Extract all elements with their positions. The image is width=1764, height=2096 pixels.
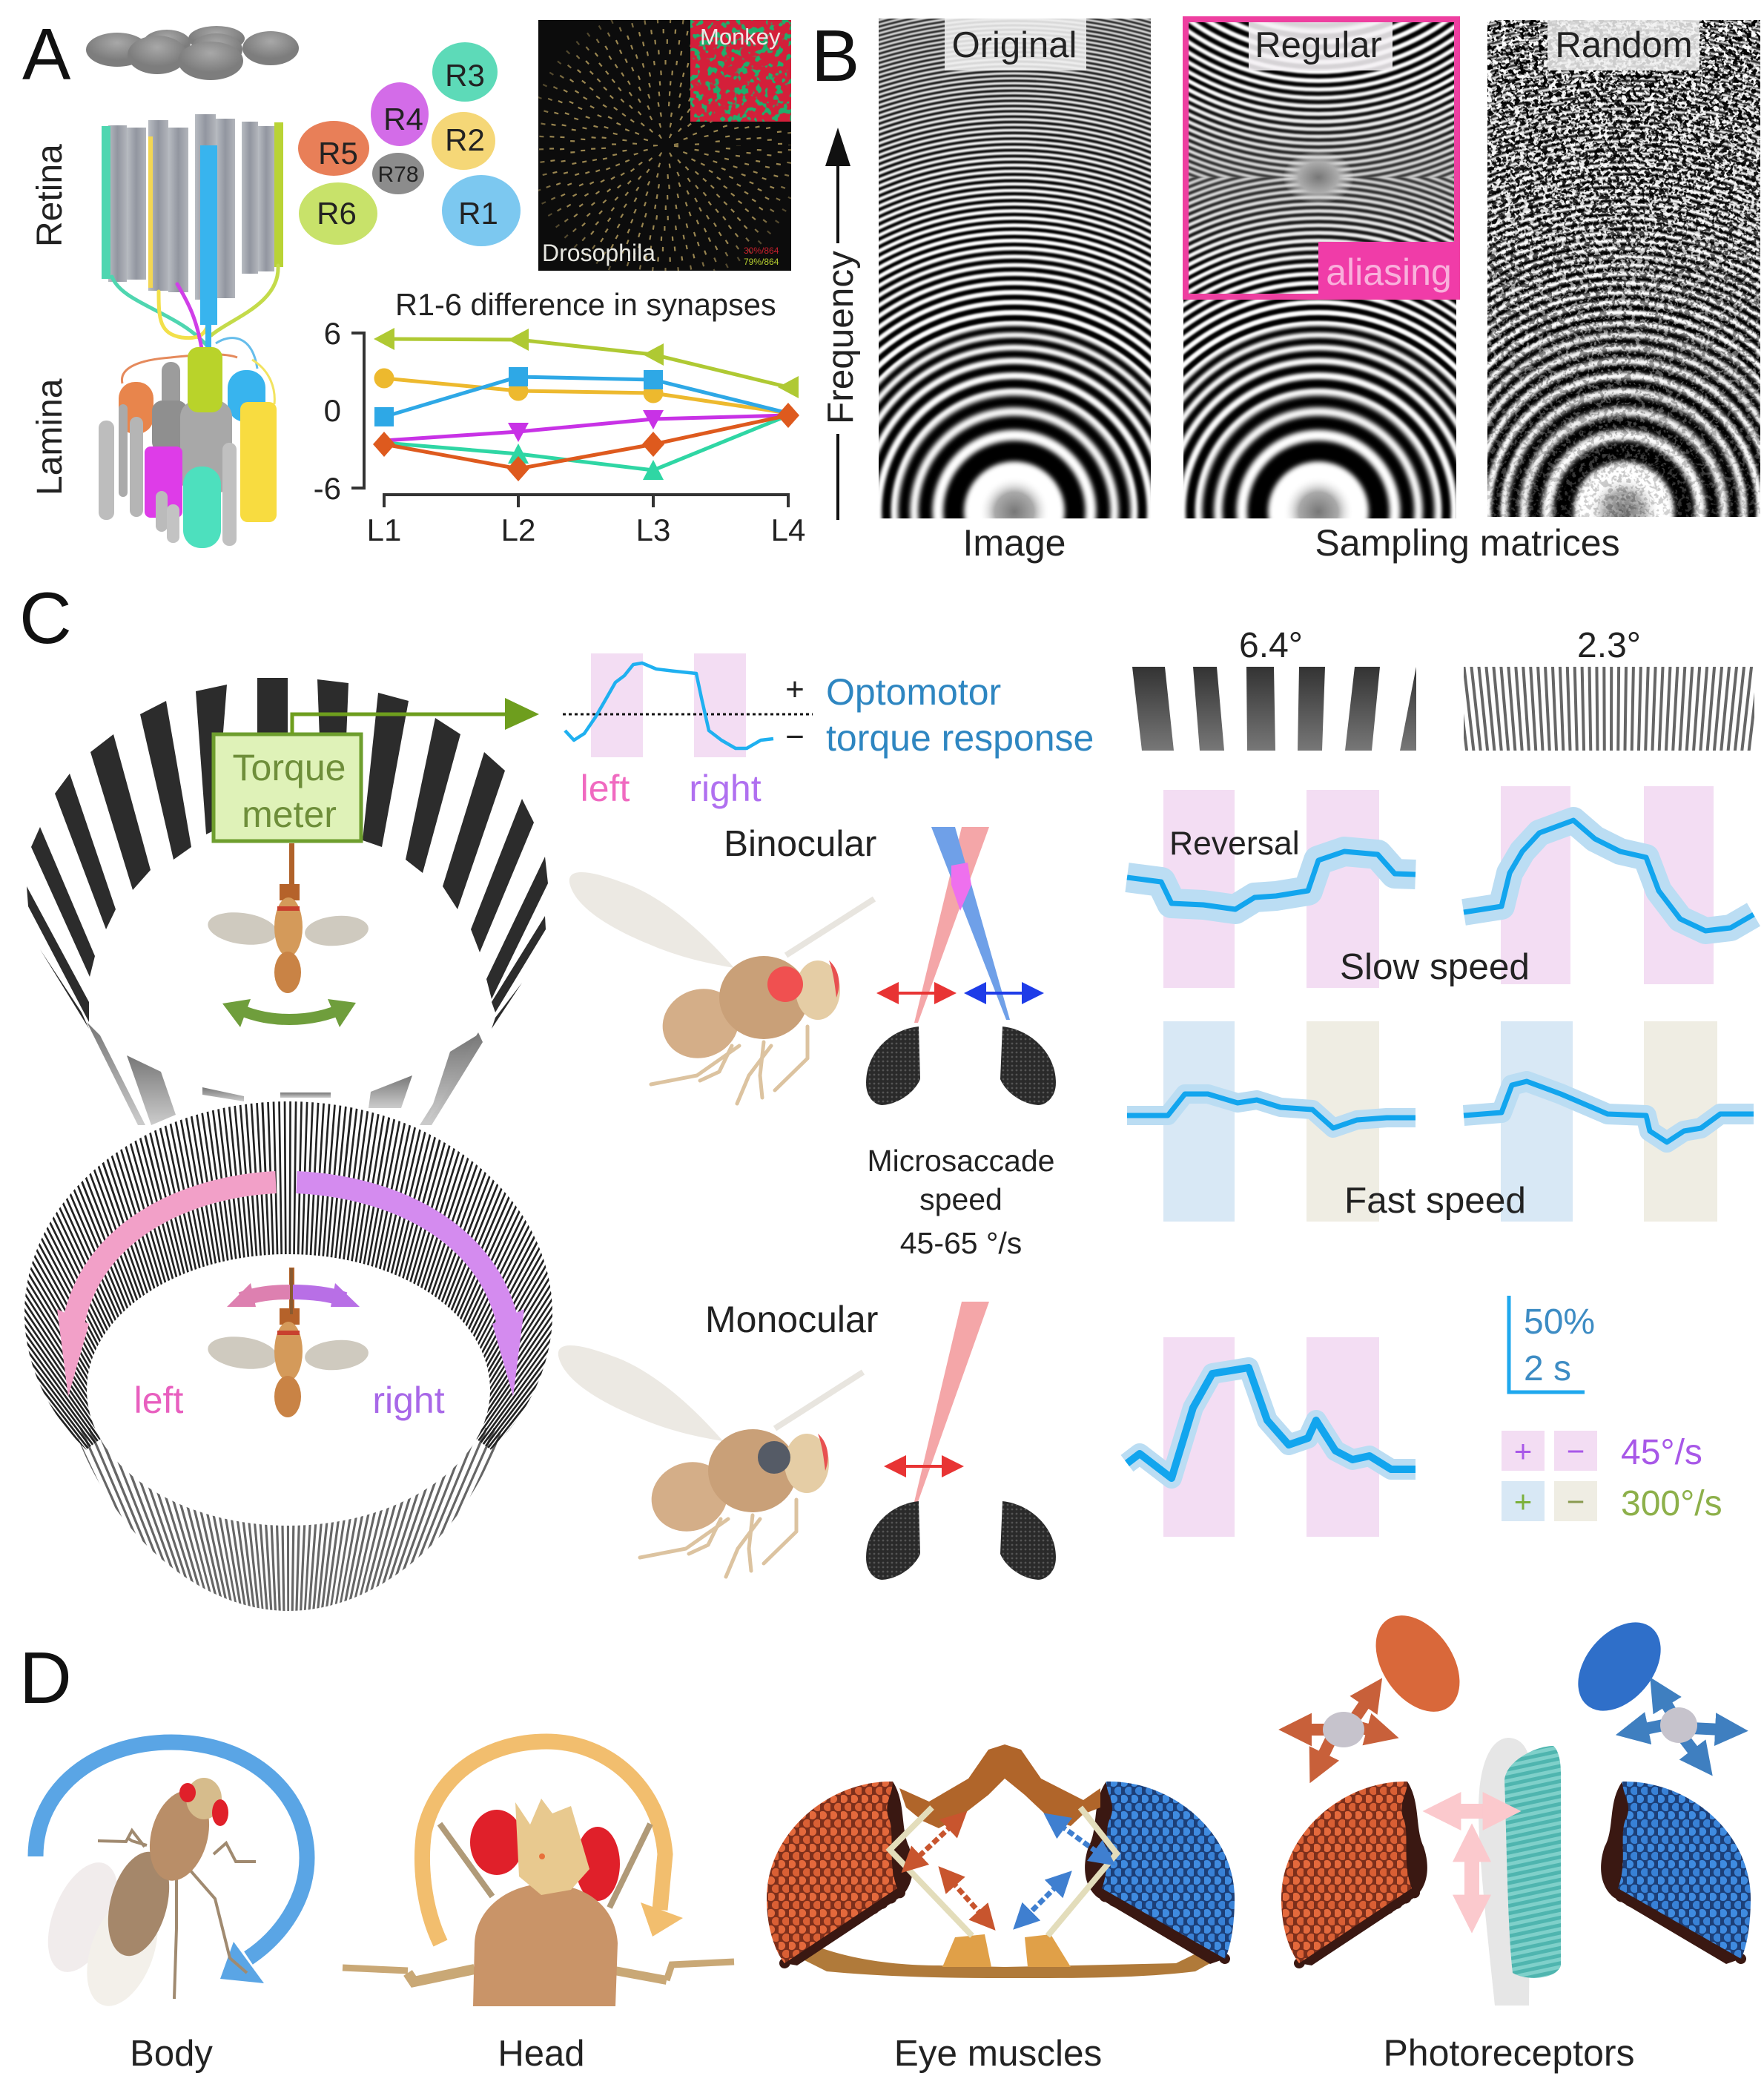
orange arrows and lens muscle [1305,1700,1373,1759]
label: Microsaccade speed: 45-65 °/s [900,1226,1022,1260]
icon: body rotation [34,1742,307,2016]
label: right: right [689,768,762,809]
panel letter D: D [19,1637,72,1718]
lens: blue [1562,1606,1677,1727]
axis: Frequency arrow: Frequency [820,251,861,424]
series R5 [373,403,799,481]
lens: orange [1358,1600,1477,1727]
axis labels: 0 [324,393,341,428]
scale bar: 50% [1524,1302,1595,1342]
panel letter A: A [22,13,71,95]
label: Binocular: Binocular [724,823,876,864]
label: right: right [372,1380,445,1421]
panel letter B: B [811,15,859,96]
series R4 [384,410,788,442]
plot: monocular 6.4 [1127,1337,1416,1537]
axis: Frequency arrow [820,128,861,520]
R1: R1 [458,196,498,231]
label: Microsaccade speed: speed [919,1182,1002,1216]
brown apodeme [899,1744,1100,1828]
R4: R4 [383,102,423,136]
icon: black eyes binocular [866,1026,1056,1105]
axes [351,333,788,507]
label: left: left [581,768,630,809]
legend: stimulus colours [1502,1431,1722,1523]
image: Random sampling [1487,20,1760,517]
series R2 [374,368,788,413]
R3 [432,42,498,102]
arrow: torque signal [292,698,539,734]
label: Optomotor torque response: Optomotor [826,671,1001,713]
label: Fast speed: Fast speed [1344,1180,1526,1221]
panel: D [19,1600,1751,2074]
plot: slow 2.3 [1464,786,1754,984]
eye: orange [1281,1782,1427,1965]
diagram: bottom drum with fine stripes [24,1101,552,1611]
panel: C [0,577,1757,1611]
diagram: binocular beams [914,827,1010,1023]
label: Original: Original [952,25,1077,65]
label: Microsaccade speed: Microsaccade [868,1144,1054,1178]
pale muscles [890,1807,1117,1936]
image: Regular sampling with aliasing [1183,16,1460,518]
R2: R2 [445,122,485,157]
arrow: blue microsaccade [964,982,1044,1004]
arrow: left pink drum arrow [57,1182,276,1397]
small caption values: 79%/864 [744,257,779,267]
label: Monocular: Monocular [705,1299,878,1340]
label: Monkey: Monkey [700,24,781,50]
plus/minus signs [785,671,805,755]
R5: R5 [318,136,358,171]
icon: head rotation [343,1741,734,2006]
plus/minus signs: − [785,719,805,755]
icon: tethered fly top [206,843,370,993]
stimulus: 2.3 degree stripes [1461,705,1757,714]
diagram: lamina terminals [99,338,277,548]
line chart: synapse differences [314,316,805,547]
photoreceptor cell [1479,1738,1561,2006]
arrow: blue [36,1742,307,1983]
pink arrows [1453,1811,1490,1902]
arrow: red microsaccade [876,982,957,1004]
eye: blue [1085,1782,1235,1964]
fly head and thorax [343,1799,734,2006]
image: Drosophila and Monkey photoreceptor mosaics [538,20,791,271]
R6: R6 [317,196,357,231]
torque meter box: Torque [233,747,346,788]
image: Original grating [879,19,1151,518]
icon: lens cluster [86,26,299,80]
arrow: right purple drum arrow [297,1182,524,1397]
label: Retina: Retina [30,144,70,247]
torque meter box: meter [242,794,337,835]
double arrows [916,1825,1099,1915]
stimulus: 6.4 degree stripes [1132,667,1416,751]
arrow: small left/right turn [227,1268,360,1314]
R78: R78 [377,162,419,187]
arrow: monocular microsaccade [884,1455,964,1477]
series R3 [384,415,788,480]
legend: stimulus colours: 300°/s [1621,1484,1722,1523]
bottom strap [791,1948,1218,1978]
label: Optomotor torque response [826,671,1094,759]
diagram: retina photoreceptor columns [102,114,283,355]
icon: black eyes monocular [866,1501,1056,1580]
label: Microsaccade speed [868,1144,1054,1260]
torque meter box [214,734,361,841]
aliasing frame [1186,19,1457,297]
axis labels [314,316,805,547]
label: Sampling matrices: Sampling matrices [1315,522,1620,564]
label: Optomotor torque response: torque response [826,717,1094,759]
R3: R3 [445,58,485,93]
legend: stimulus colours: 45°/s [1621,1433,1702,1472]
label: Random: Random [1555,25,1693,65]
R4 [371,82,429,146]
axis labels: L1 [367,513,401,547]
arrow: green rotation [222,999,356,1027]
R5 [298,121,369,176]
scale bar: 2 s [1524,1349,1571,1388]
plot: fast 2.3 [1464,1021,1754,1222]
plus/minus signs: + [785,671,805,708]
arrow: orange [423,1741,683,1943]
axis labels: -6 [314,471,341,506]
label: Image: Image [963,522,1066,564]
eye: orange [767,1782,913,1965]
blocks [942,1934,1071,1967]
eye: blue [1601,1782,1751,1964]
blue arrows and lens muscle [1642,1700,1722,1755]
diagram: top drum with wide stripes [27,678,548,1125]
axis labels: L4 [771,513,805,547]
label: Regular: Regular [1255,25,1382,65]
chart: optomotor torque example [563,653,813,757]
label: 6.4 degrees: 6.4° [1239,626,1303,665]
legend: stimulus colours: − [1567,1434,1585,1469]
label: Drosophila: Drosophila [542,240,655,266]
label: Lamina: Lamina [30,378,70,495]
label: Eye muscles: Eye muscles [894,2033,1102,2074]
aliasing label [1318,242,1459,299]
legend: stimulus colours: + [1514,1484,1532,1519]
aliasing label: aliasing [1326,251,1452,293]
plot: slow 6.4 [1127,790,1416,988]
label: Reversal: Reversal [1169,825,1300,862]
R78 [372,153,424,194]
label: 2.3 degrees: 2.3° [1577,626,1641,665]
small caption values [744,245,779,267]
panel letter C: C [19,577,72,659]
icon: tethered fly bottom [206,1268,370,1417]
scale bar [1509,1296,1595,1392]
diagram: photoreceptors [1281,1600,1751,2006]
icon: fly side view binocular [569,872,874,1104]
legend: R1-R6 photoreceptor ellipses [298,42,521,246]
series R1 [374,367,788,426]
diagram: monocular beam [914,1302,989,1502]
label: Body: Body [130,2034,213,2074]
fly body [34,1778,256,2016]
legend: stimulus colours: − [1567,1484,1585,1519]
chart title: R1-6 difference in synapses [395,287,776,322]
icon: fly side view monocular [558,1345,863,1577]
axis labels: 6 [324,316,341,351]
diagram: eye muscles [767,1744,1235,1978]
R1 [442,175,521,246]
axis labels: L3 [636,513,670,547]
label: Slow speed: Slow speed [1340,946,1530,987]
axis labels: L2 [501,513,535,547]
R2 [432,112,495,170]
R6 [299,182,377,245]
label: Head: Head [498,2034,585,2074]
small caption values: 30%/864 [744,245,779,256]
plot: fast 6.4 [1127,1021,1416,1222]
legend: stimulus colours: + [1514,1434,1532,1469]
series R6 [374,328,799,398]
panel: A [22,10,805,548]
label: Photoreceptors: Photoreceptors [1383,2032,1635,2074]
label: left: left [134,1380,183,1421]
panel: B [817,16,1760,564]
